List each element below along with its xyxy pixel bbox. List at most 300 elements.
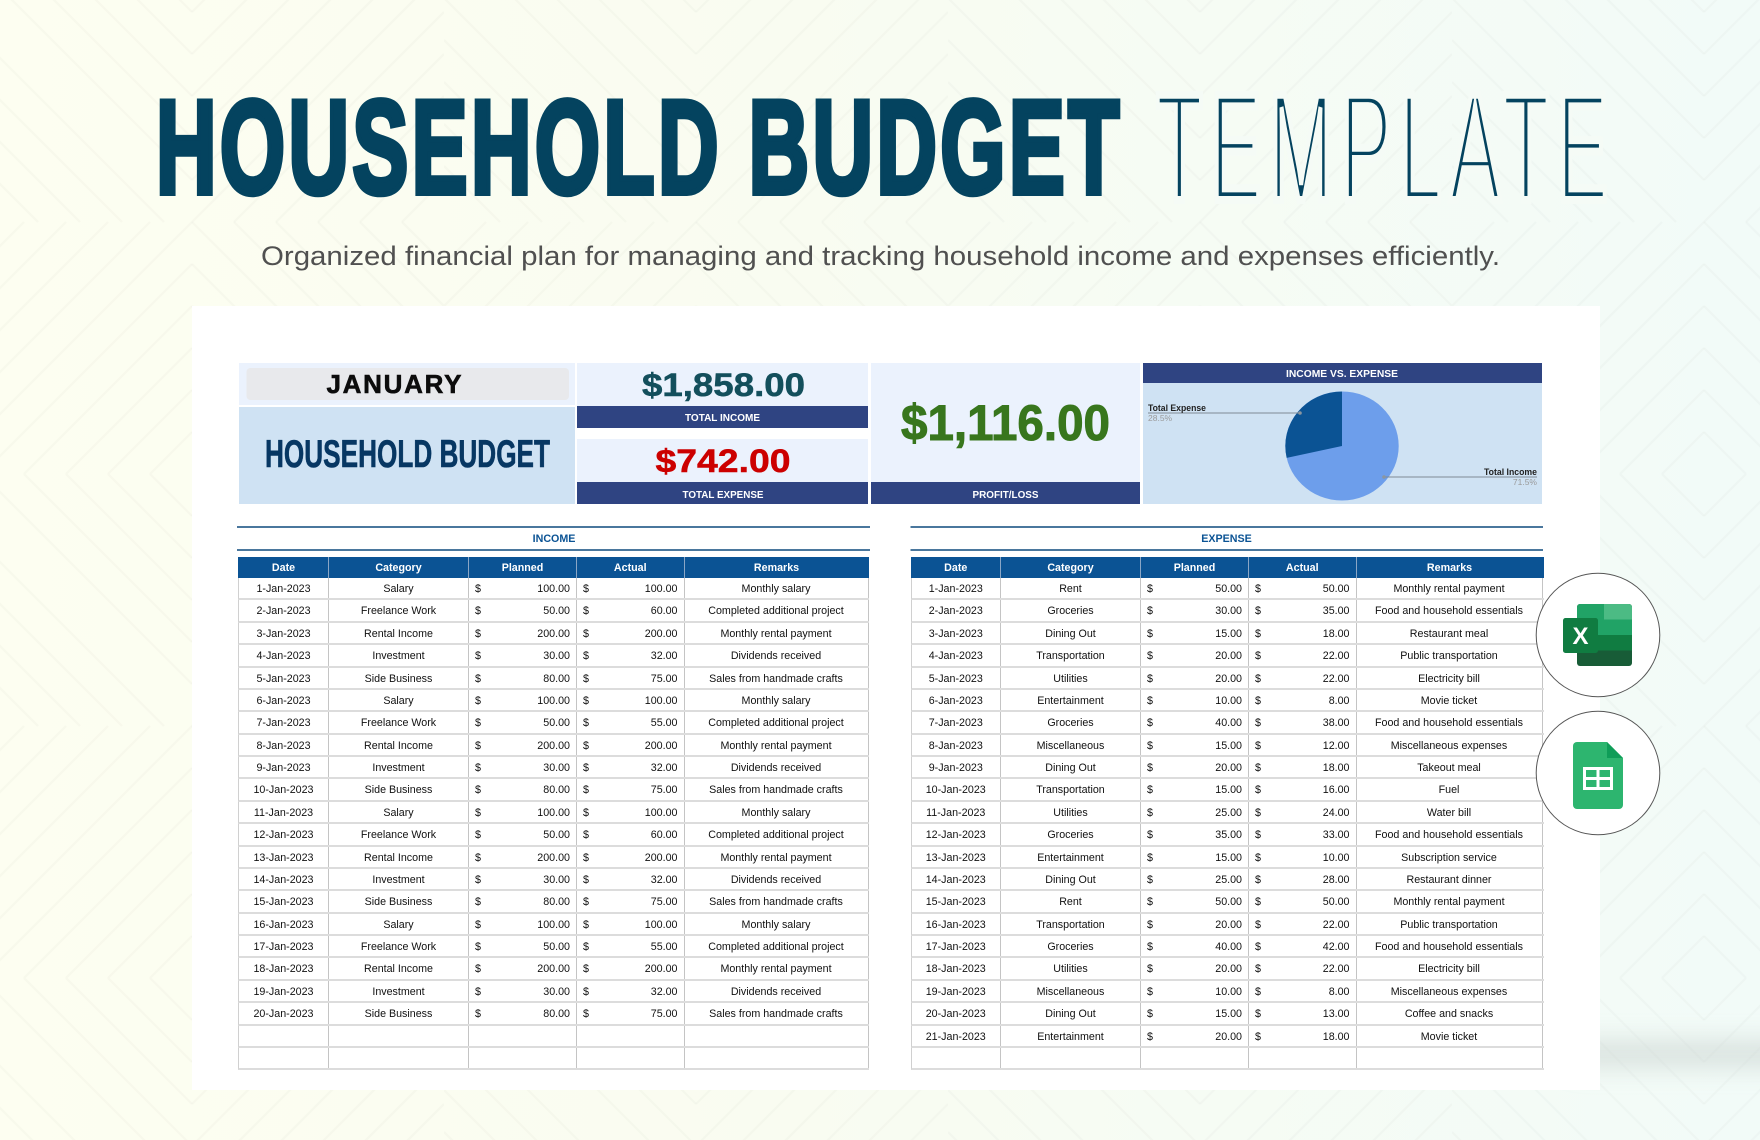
- income table: $: [475, 672, 481, 684]
- pie chart: income vs expense: 71.5%: [1513, 477, 1537, 487]
- income table: 20-Jan-2023: [253, 1008, 314, 1020]
- expense table: 38.00: [1323, 717, 1350, 729]
- expense table: 13.00: [1323, 1008, 1350, 1020]
- income table: Completed additional project: [708, 717, 844, 729]
- total expense card: $742.00: [656, 443, 790, 479]
- income table: 80.00: [543, 784, 570, 796]
- icon: excel: X: [1572, 623, 1589, 650]
- expense table: Rent: [1059, 583, 1082, 595]
- expense table: 10-Jan-2023: [926, 784, 986, 796]
- income table: 3-Jan-2023: [256, 628, 311, 640]
- expense table: Miscellaneous expenses: [1391, 986, 1507, 998]
- expense table: 17-Jan-2023: [926, 941, 986, 953]
- expense table: $: [1147, 628, 1153, 640]
- income table: 2-Jan-2023: [256, 605, 311, 617]
- expense table: $: [1255, 717, 1261, 729]
- expense table: 20.00: [1215, 1030, 1242, 1042]
- expense table: Movie ticket: [1421, 695, 1477, 707]
- pie chart: income vs expense: Total Expense: [1148, 403, 1206, 413]
- expense table: Miscellaneous: [1037, 740, 1104, 752]
- expense table: Miscellaneous expenses: [1391, 740, 1507, 752]
- expense table: $: [1147, 963, 1153, 975]
- panel: dashboard summary: [237, 363, 1543, 551]
- expense table: 20.00: [1215, 963, 1242, 975]
- pie chart: income vs expense: INCOME VS. EXPENSE: [1286, 368, 1398, 380]
- expense table: Food and household essentials: [1375, 717, 1523, 729]
- expense table: 3-Jan-2023: [929, 628, 983, 640]
- income table: 100.00: [537, 807, 570, 819]
- income table: $: [475, 717, 481, 729]
- income table: $: [583, 583, 589, 595]
- income table: 6-Jan-2023: [256, 695, 311, 707]
- expense table: 22.00: [1323, 963, 1350, 975]
- expense table: Groceries: [1047, 605, 1094, 617]
- income table: 10-Jan-2023: [253, 784, 314, 796]
- pie chart: income vs expense: [1143, 363, 1542, 504]
- month box: [239, 363, 575, 405]
- expense table: Remarks: [1427, 562, 1472, 574]
- subtitle: Organized financial plan for managing and tracking household income and expenses efficiently.: [261, 241, 1500, 271]
- income table: Rental Income: [364, 963, 433, 975]
- expense table: 30.00: [1215, 605, 1242, 617]
- expense table: $: [1255, 852, 1261, 864]
- expense table: $: [1147, 896, 1153, 908]
- income table: 14-Jan-2023: [253, 874, 314, 886]
- income table: $: [583, 650, 589, 662]
- title: [156, 62, 1613, 271]
- income table: 16-Jan-2023: [253, 919, 314, 931]
- expense table: 42.00: [1323, 941, 1350, 953]
- income table: $: [475, 695, 481, 707]
- expense table: Food and household essentials: [1375, 941, 1523, 953]
- income table: Monthly rental payment: [720, 963, 832, 975]
- income table: 200.00: [537, 628, 570, 640]
- title: household budget: HOUSEHOLD BUDGET: [156, 72, 1123, 222]
- expense table: $: [1255, 896, 1261, 908]
- expense table: $: [1147, 919, 1153, 931]
- household budget heading: HOUSEHOLD BUDGET: [265, 433, 550, 476]
- expense table: 20.00: [1215, 650, 1242, 662]
- expense table: Actual: [1286, 562, 1319, 574]
- expense table: 25.00: [1215, 874, 1242, 886]
- expense table: 15.00: [1215, 1008, 1242, 1020]
- income table: 100.00: [645, 695, 678, 707]
- expense table: 15.00: [1215, 852, 1242, 864]
- total income card: TOTAL INCOME: [685, 412, 760, 424]
- income table: $: [475, 919, 481, 931]
- income table: $: [583, 986, 589, 998]
- expense table: 2-Jan-2023: [929, 605, 983, 617]
- income section title: [237, 527, 870, 550]
- expense table: $: [1255, 740, 1261, 752]
- expense table: Dining Out: [1045, 628, 1096, 640]
- expense table: 35.00: [1323, 605, 1350, 617]
- expense table: 15.00: [1215, 784, 1242, 796]
- income table: 1-Jan-2023: [256, 583, 311, 595]
- total expense card: [577, 439, 868, 504]
- income table: Side Business: [365, 672, 432, 684]
- expense table: 14-Jan-2023: [926, 874, 986, 886]
- expense table: 1-Jan-2023: [929, 583, 983, 595]
- expense table: Rent: [1059, 896, 1082, 908]
- expense table: 10.00: [1323, 852, 1350, 864]
- income table: $: [475, 784, 481, 796]
- income table: $: [583, 695, 589, 707]
- income table: 50.00: [543, 829, 570, 841]
- profit/loss card: $1,116.00: [901, 395, 1110, 451]
- expense table: Restaurant meal: [1410, 628, 1488, 640]
- expense table: 33.00: [1323, 829, 1350, 841]
- income table: 200.00: [537, 740, 570, 752]
- income table: 75.00: [651, 672, 678, 684]
- income table: 200.00: [537, 963, 570, 975]
- icon: google sheets: [1536, 711, 1660, 835]
- expense table: 8.00: [1329, 695, 1350, 707]
- income table: Monthly salary: [742, 919, 810, 931]
- expense table: Public transportation: [1400, 650, 1498, 662]
- title: template: TEMPLATE: [1156, 62, 1613, 233]
- expense table: $: [1255, 672, 1261, 684]
- income table: $: [475, 896, 481, 908]
- income table: $: [583, 740, 589, 752]
- expense table: $: [1147, 1008, 1153, 1020]
- month box: JANUARY: [326, 369, 462, 399]
- income table: $: [475, 829, 481, 841]
- income table: 100.00: [537, 919, 570, 931]
- expense table: $: [1147, 852, 1153, 864]
- expense table: 20.00: [1215, 672, 1242, 684]
- panel: white sheet: [192, 306, 1600, 1090]
- income table: Planned: [502, 562, 543, 574]
- expense table: 40.00: [1215, 941, 1242, 953]
- income table: 75.00: [651, 784, 678, 796]
- expense table: $: [1147, 605, 1153, 617]
- total income card: $1,858.00: [642, 367, 805, 403]
- expense table: $: [1147, 650, 1153, 662]
- expense table: $: [1255, 986, 1261, 998]
- pie chart: income vs expense: Total Income: [1484, 467, 1537, 477]
- total income card: [577, 363, 868, 428]
- income table: Monthly salary: [742, 807, 810, 819]
- income section title: INCOME: [533, 533, 575, 545]
- expense table: $: [1255, 762, 1261, 774]
- expense table: Transportation: [1036, 784, 1105, 796]
- expense table: Coffee and snacks: [1405, 1008, 1493, 1020]
- expense table: $: [1147, 1030, 1153, 1042]
- expense table: Groceries: [1047, 717, 1094, 729]
- expense table: Utilities: [1053, 807, 1088, 819]
- expense table: Subscription service: [1401, 852, 1497, 864]
- income table: Investment: [372, 986, 425, 998]
- expense table: 25.00: [1215, 807, 1242, 819]
- total expense card: TOTAL EXPENSE: [682, 489, 764, 501]
- income table: 7-Jan-2023: [256, 717, 311, 729]
- income table: Category: [375, 562, 422, 574]
- income table: 13-Jan-2023: [253, 852, 314, 864]
- income table: 12-Jan-2023: [253, 829, 314, 841]
- income table: $: [475, 650, 481, 662]
- income table: $: [475, 852, 481, 864]
- expense table: $: [1147, 740, 1153, 752]
- income table: $: [583, 852, 589, 864]
- expense table: Electricity bill: [1418, 672, 1480, 684]
- income table: 100.00: [645, 919, 678, 931]
- income table: $: [583, 1008, 589, 1020]
- expense table: Water bill: [1427, 807, 1471, 819]
- income table: Completed additional project: [708, 829, 844, 841]
- expense table: 18-Jan-2023: [926, 963, 986, 975]
- income table: 32.00: [651, 986, 678, 998]
- expense table: 15.00: [1215, 740, 1242, 752]
- income table: 18-Jan-2023: [253, 963, 314, 975]
- income table: 32.00: [651, 762, 678, 774]
- expense table: Restaurant dinner: [1407, 874, 1491, 886]
- income table: $: [475, 605, 481, 617]
- income table: Side Business: [365, 1008, 432, 1020]
- expense table: 35.00: [1215, 829, 1242, 841]
- expense table: Miscellaneous: [1037, 986, 1104, 998]
- expense table: $: [1147, 672, 1153, 684]
- expense table: $: [1147, 807, 1153, 819]
- income table: $: [583, 807, 589, 819]
- expense table: 10.00: [1215, 695, 1242, 707]
- expense table: Movie ticket: [1421, 1030, 1477, 1042]
- expense table: [911, 557, 1544, 1070]
- income table: $: [475, 628, 481, 640]
- income table: Freelance Work: [361, 717, 436, 729]
- income table: Salary: [383, 695, 414, 707]
- expense table: Category: [1047, 562, 1094, 574]
- income table: 17-Jan-2023: [253, 941, 314, 953]
- expense table: 50.00: [1215, 583, 1242, 595]
- expense table: $: [1147, 784, 1153, 796]
- expense table: Takeout meal: [1417, 762, 1481, 774]
- expense table: 20.00: [1215, 762, 1242, 774]
- income table: Sales from handmade crafts: [709, 896, 843, 908]
- income table: 55.00: [651, 941, 678, 953]
- expense table: 11-Jan-2023: [926, 807, 985, 819]
- expense table: $: [1255, 695, 1261, 707]
- expense table: 28.00: [1323, 874, 1350, 886]
- income table: 80.00: [543, 1008, 570, 1020]
- income table: $: [583, 963, 589, 975]
- income table: 50.00: [543, 941, 570, 953]
- expense table: 19-Jan-2023: [926, 986, 986, 998]
- income table: 100.00: [537, 583, 570, 595]
- income table: $: [583, 762, 589, 774]
- income table: 200.00: [537, 852, 570, 864]
- income table: $: [475, 874, 481, 886]
- income table: 75.00: [651, 1008, 678, 1020]
- expense table: $: [1255, 963, 1261, 975]
- expense table: 18.00: [1323, 628, 1350, 640]
- expense table: $: [1255, 1030, 1261, 1042]
- expense table: $: [1255, 941, 1261, 953]
- income table: 100.00: [645, 583, 678, 595]
- expense table: 50.00: [1323, 896, 1350, 908]
- expense table: $: [1255, 829, 1261, 841]
- expense table: $: [1255, 874, 1261, 886]
- income table: Salary: [383, 583, 414, 595]
- income table: Dividends received: [731, 874, 821, 886]
- income table: Freelance Work: [361, 941, 436, 953]
- income table: Dividends received: [731, 986, 821, 998]
- expense table: Planned: [1174, 562, 1215, 574]
- income table: $: [583, 829, 589, 841]
- expense table: 7-Jan-2023: [929, 717, 983, 729]
- income table: 60.00: [651, 829, 678, 841]
- income table: 5-Jan-2023: [256, 672, 311, 684]
- income table: Sales from handmade crafts: [709, 784, 843, 796]
- expense table: Entertainment: [1037, 695, 1104, 707]
- expense table: 8.00: [1329, 986, 1350, 998]
- income table: Rental Income: [364, 628, 433, 640]
- income table: $: [583, 628, 589, 640]
- income table: 200.00: [645, 628, 678, 640]
- expense table: $: [1255, 807, 1261, 819]
- expense table: 5-Jan-2023: [929, 672, 983, 684]
- expense table: 12.00: [1323, 740, 1350, 752]
- income table: 19-Jan-2023: [253, 986, 314, 998]
- expense table: 16.00: [1323, 784, 1350, 796]
- expense table: Dining Out: [1045, 874, 1096, 886]
- expense table: $: [1255, 1008, 1261, 1020]
- expense table: Utilities: [1053, 672, 1088, 684]
- income table: 55.00: [651, 717, 678, 729]
- income table: 9-Jan-2023: [256, 762, 311, 774]
- expense table: $: [1147, 695, 1153, 707]
- income table: Investment: [372, 762, 425, 774]
- expense table: Food and household essentials: [1375, 829, 1523, 841]
- income table: $: [583, 717, 589, 729]
- income table: 80.00: [543, 896, 570, 908]
- expense table: Dining Out: [1045, 762, 1096, 774]
- expense table: 22.00: [1323, 919, 1350, 931]
- income table: Dividends received: [731, 762, 821, 774]
- income table: $: [583, 919, 589, 931]
- expense table: Transportation: [1036, 919, 1105, 931]
- expense table: $: [1147, 717, 1153, 729]
- expense table: $: [1147, 583, 1153, 595]
- expense table: 50.00: [1215, 896, 1242, 908]
- income table: $: [475, 986, 481, 998]
- expense table: 20.00: [1215, 919, 1242, 931]
- income table: 100.00: [645, 807, 678, 819]
- expense table: $: [1147, 829, 1153, 841]
- expense table: $: [1255, 628, 1261, 640]
- expense table: Groceries: [1047, 829, 1094, 841]
- expense table: 21-Jan-2023: [926, 1030, 986, 1042]
- income table: 50.00: [543, 717, 570, 729]
- income table: 80.00: [543, 672, 570, 684]
- income table: Remarks: [754, 562, 799, 574]
- expense table: 40.00: [1215, 717, 1242, 729]
- income table: 30.00: [543, 986, 570, 998]
- expense table: Monthly rental payment: [1393, 583, 1505, 595]
- income table: $: [475, 762, 481, 774]
- income table: Rental Income: [364, 852, 433, 864]
- expense table: Monthly rental payment: [1393, 896, 1505, 908]
- income table: $: [475, 583, 481, 595]
- income table: Monthly salary: [742, 695, 810, 707]
- income table: Rental Income: [364, 740, 433, 752]
- expense table: Dining Out: [1045, 1008, 1096, 1020]
- income table: 30.00: [543, 762, 570, 774]
- income table: $: [583, 941, 589, 953]
- expense table: Entertainment: [1037, 852, 1104, 864]
- income table: $: [583, 874, 589, 886]
- expense table: 20-Jan-2023: [926, 1008, 986, 1020]
- expense table: Food and household essentials: [1375, 605, 1523, 617]
- income table: Date: [272, 562, 295, 574]
- income table: [238, 557, 869, 1070]
- income table: 60.00: [651, 605, 678, 617]
- pie chart: income vs expense: 28.5%: [1148, 413, 1173, 423]
- expense table: Fuel: [1439, 784, 1459, 796]
- income table: Monthly rental payment: [720, 740, 832, 752]
- expense table: 22.00: [1323, 672, 1350, 684]
- income table: 200.00: [645, 852, 678, 864]
- income table: 30.00: [543, 650, 570, 662]
- expense table: 6-Jan-2023: [929, 695, 983, 707]
- income table: Salary: [383, 919, 414, 931]
- income table: Investment: [372, 874, 425, 886]
- expense table: $: [1255, 919, 1261, 931]
- income table: 8-Jan-2023: [256, 740, 311, 752]
- expense table: Groceries: [1047, 941, 1094, 953]
- income table: $: [583, 784, 589, 796]
- expense table: 24.00: [1323, 807, 1350, 819]
- expense table: $: [1147, 941, 1153, 953]
- income table: $: [583, 605, 589, 617]
- expense table: 12-Jan-2023: [926, 829, 986, 841]
- income table: 11-Jan-2023: [254, 807, 313, 819]
- income table: Monthly rental payment: [720, 628, 832, 640]
- expense table: 16-Jan-2023: [926, 919, 986, 931]
- income table: 4-Jan-2023: [256, 650, 311, 662]
- income table: 15-Jan-2023: [253, 896, 314, 908]
- income table: $: [583, 672, 589, 684]
- household budget heading: [239, 407, 575, 504]
- expense table: 22.00: [1323, 650, 1350, 662]
- income table: Actual: [614, 562, 647, 574]
- income table: $: [475, 963, 481, 975]
- income table: Salary: [383, 807, 414, 819]
- income table: Freelance Work: [361, 605, 436, 617]
- income table: 32.00: [651, 650, 678, 662]
- income table: Freelance Work: [361, 829, 436, 841]
- expense section title: [910, 527, 1543, 550]
- expense table: Electricity bill: [1418, 963, 1480, 975]
- expense table: Utilities: [1053, 963, 1088, 975]
- expense table: $: [1255, 583, 1261, 595]
- income table: $: [475, 1008, 481, 1020]
- expense table: Entertainment: [1037, 1030, 1104, 1042]
- income table: 50.00: [543, 605, 570, 617]
- expense table: 15-Jan-2023: [926, 896, 986, 908]
- icon: excel: [1536, 573, 1660, 697]
- income table: Side Business: [365, 784, 432, 796]
- income table: Sales from handmade crafts: [709, 1008, 843, 1020]
- expense table: 9-Jan-2023: [929, 762, 983, 774]
- income table: Side Business: [365, 896, 432, 908]
- expense table: $: [1255, 650, 1261, 662]
- income table: 32.00: [651, 874, 678, 886]
- expense table: 10.00: [1215, 986, 1242, 998]
- income table: Completed additional project: [708, 941, 844, 953]
- income table: $: [475, 807, 481, 819]
- expense table: $: [1147, 874, 1153, 886]
